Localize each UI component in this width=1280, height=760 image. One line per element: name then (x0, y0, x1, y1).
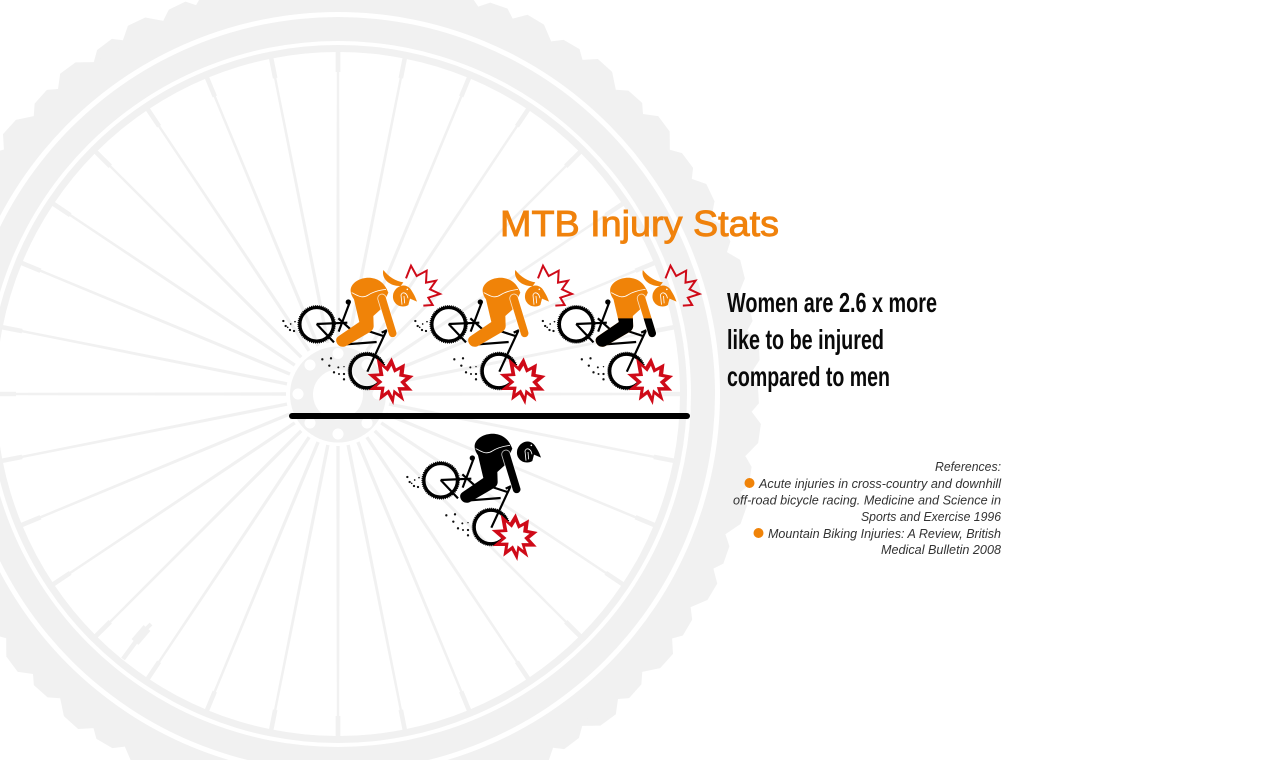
rider 2: woman injured (414, 266, 572, 405)
rider 4: man injured (406, 434, 541, 561)
references: Mountain Biking Injuries: A Review, British (768, 527, 1001, 541)
references: Medical Bulletin 2008 (881, 543, 1001, 557)
references: Acute injuries in cross-country and downhill (758, 477, 1002, 491)
statement text: like to be injured (727, 324, 884, 355)
statement text (727, 287, 937, 392)
references (733, 460, 1002, 557)
statement text: compared to men (727, 361, 890, 392)
rider 1: woman injured (282, 266, 440, 405)
rim rings (0, 12, 720, 760)
references: References: (935, 460, 1001, 474)
divider bar (289, 413, 690, 419)
brake disc hub (290, 346, 386, 442)
references: Sports and Exercise 1996 (861, 510, 1001, 524)
title: MTB Injury Stats (500, 203, 779, 244)
rider 3: woman partly filled, 0.6 (542, 266, 699, 405)
valve (123, 624, 151, 659)
references: off-road bicycle racing. Medicine and Science in (733, 494, 1001, 508)
statement text: Women are 2.6 x more (727, 287, 937, 318)
spokes (0, 13, 719, 760)
